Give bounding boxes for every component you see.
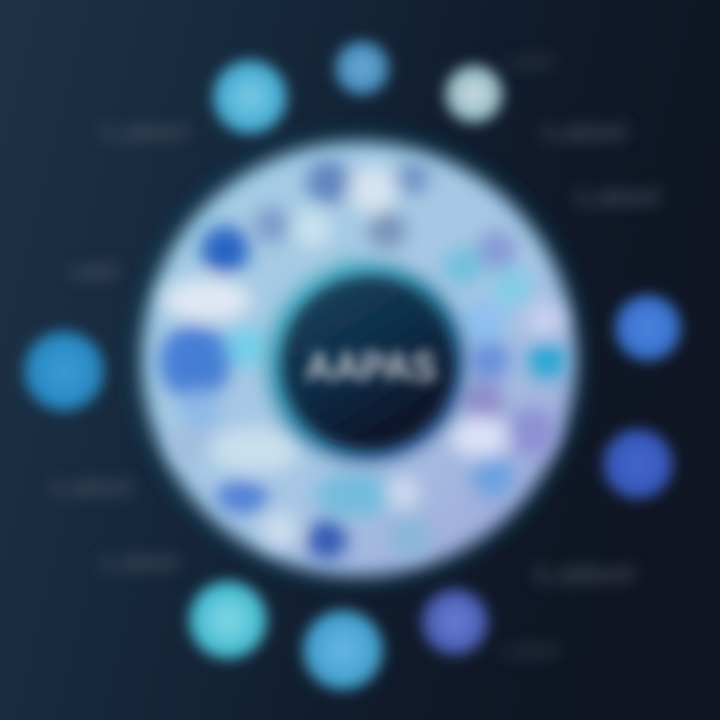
ring halo bbox=[118, 118, 598, 598]
label: bottom left: Label bbox=[102, 549, 178, 576]
ring segments bbox=[159, 160, 566, 560]
node: right lower bbox=[603, 429, 673, 499]
node: bottom right bbox=[422, 589, 488, 655]
main ring bbox=[118, 118, 598, 598]
node: bottom bbox=[303, 610, 383, 690]
node: top bbox=[335, 41, 389, 95]
faint labels bbox=[50, 48, 660, 664]
node: right upper bbox=[615, 295, 681, 361]
node: left bbox=[24, 331, 104, 411]
ring base bbox=[143, 143, 575, 575]
hub disc bbox=[282, 277, 454, 449]
label: left upper: Label bbox=[69, 258, 119, 285]
label: right upper one: Label bbox=[543, 119, 627, 146]
node: bottom left bbox=[189, 581, 267, 659]
label: bottom right two: Label bbox=[500, 637, 560, 664]
label: bottom right one: Label bbox=[535, 561, 635, 588]
hub glow bbox=[266, 262, 466, 462]
node: top right bbox=[445, 65, 503, 123]
central hub bbox=[266, 262, 466, 462]
label: left lower: Label bbox=[50, 474, 134, 501]
label: top left: Label bbox=[102, 119, 188, 146]
label: top right high: Label bbox=[505, 48, 555, 75]
label: right upper two: Label bbox=[576, 184, 660, 211]
node: top left bbox=[213, 60, 287, 134]
hub title: AAPAS bbox=[305, 343, 437, 390]
